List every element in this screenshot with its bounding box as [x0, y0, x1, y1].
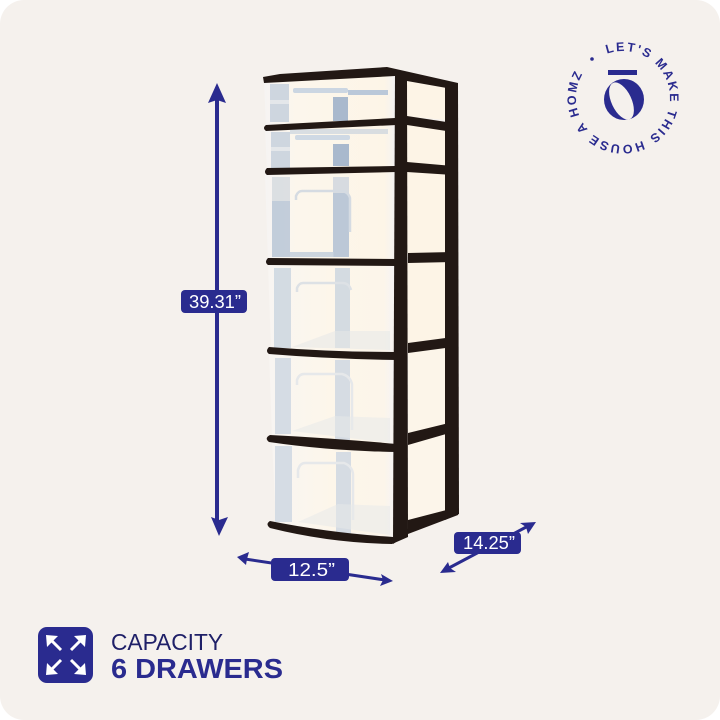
drawer 1: [264, 74, 395, 126]
drawer 2: [265, 122, 395, 170]
badge dot: [590, 57, 594, 61]
circular slogan: LET'S MAKE THIS HOUSE A HOMZ: [567, 42, 679, 154]
tower black frame: [263, 67, 459, 544]
height label: 39.31”: [189, 292, 241, 312]
height dimension arrow: [208, 83, 228, 536]
drawer 3: [265, 170, 395, 260]
depth dimension arrow: [440, 522, 536, 573]
depth label: [454, 532, 521, 554]
capacity value: 6 DRAWERS: [111, 653, 283, 684]
depth label: 14.25”: [463, 533, 515, 553]
drawer 5: [269, 352, 394, 444]
width label: 12.5”: [288, 560, 335, 580]
width dimension arrow: [237, 552, 393, 586]
capacity icon: [38, 627, 93, 683]
width label: [271, 558, 349, 581]
brand badge: [567, 42, 679, 154]
product: six drawer storage tower: [263, 67, 459, 544]
capacity heading: CAPACITY: [111, 629, 223, 655]
logo o: [604, 79, 644, 123]
drawer 6: [272, 440, 394, 537]
logo bar: [608, 70, 637, 75]
height label: [181, 290, 247, 313]
drawer 4: [268, 264, 394, 352]
side panels: [406, 81, 446, 522]
